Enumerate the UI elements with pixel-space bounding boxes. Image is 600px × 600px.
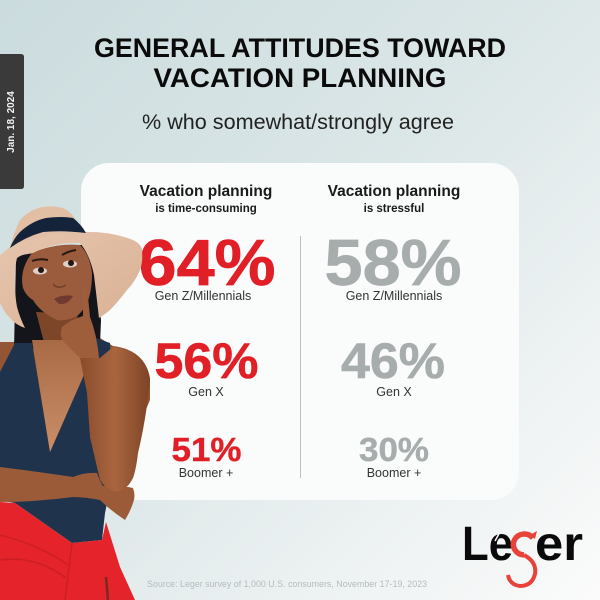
chest — [32, 340, 88, 452]
navy swimsuit — [0, 338, 114, 543]
neck — [36, 312, 78, 350]
column: time-consuming: is time-consuming — [155, 203, 257, 215]
hat crown — [10, 206, 82, 247]
column: time-consuming: Boomer + — [179, 466, 233, 480]
logo: Leger: er — [535, 518, 583, 571]
hat brim — [0, 232, 142, 328]
column: stressful: 46% — [341, 333, 445, 389]
facial features — [32, 250, 77, 304]
column: stressful: 58% — [324, 226, 462, 299]
column: stressful: Gen Z/Millennials — [346, 289, 442, 303]
column: time-consuming: Vacation planning — [140, 183, 272, 200]
torso skin and shoulders — [0, 336, 150, 480]
raised arm — [80, 347, 150, 492]
source note: Source: Leger survey of 1,000 U.S. consumers, November 17-19, 2023 — [147, 579, 427, 590]
column: time-consuming: Gen X — [188, 385, 224, 399]
column: time-consuming — [138, 183, 276, 480]
column: stressful — [324, 183, 462, 480]
subtitle: % who somewhat/strongly agree — [142, 111, 454, 134]
date tab — [0, 54, 24, 189]
column: stressful: 30% — [359, 431, 429, 468]
column: time-consuming: Gen Z/Millennials — [155, 289, 251, 303]
date tab: Jan. 18, 2024 — [6, 91, 17, 153]
hat band — [10, 217, 86, 248]
title: GENERAL ATTITUDES TOWARD — [94, 33, 506, 63]
panel: results — [81, 163, 519, 500]
column: stressful: Gen X — [376, 385, 412, 399]
logo: Leger — [462, 518, 583, 586]
hair — [14, 244, 101, 350]
column divider — [300, 236, 302, 478]
column: time-consuming: 51% — [172, 431, 242, 468]
column: stressful: is stressful — [364, 203, 424, 215]
column: time-consuming: 64% — [138, 226, 276, 299]
photo: woman in sun hat — [0, 206, 150, 600]
title: VACATION PLANNING — [154, 63, 446, 93]
folded arm — [0, 467, 134, 520]
wrap folds — [0, 535, 108, 600]
raised hand — [61, 287, 99, 358]
column: stressful: Boomer + — [367, 466, 421, 480]
face — [22, 245, 92, 320]
logo: Leger: Le — [462, 518, 513, 571]
column: time-consuming: 56% — [154, 333, 258, 389]
column: stressful: Vacation planning — [328, 183, 460, 200]
title — [94, 33, 506, 93]
red wrap — [0, 502, 135, 600]
